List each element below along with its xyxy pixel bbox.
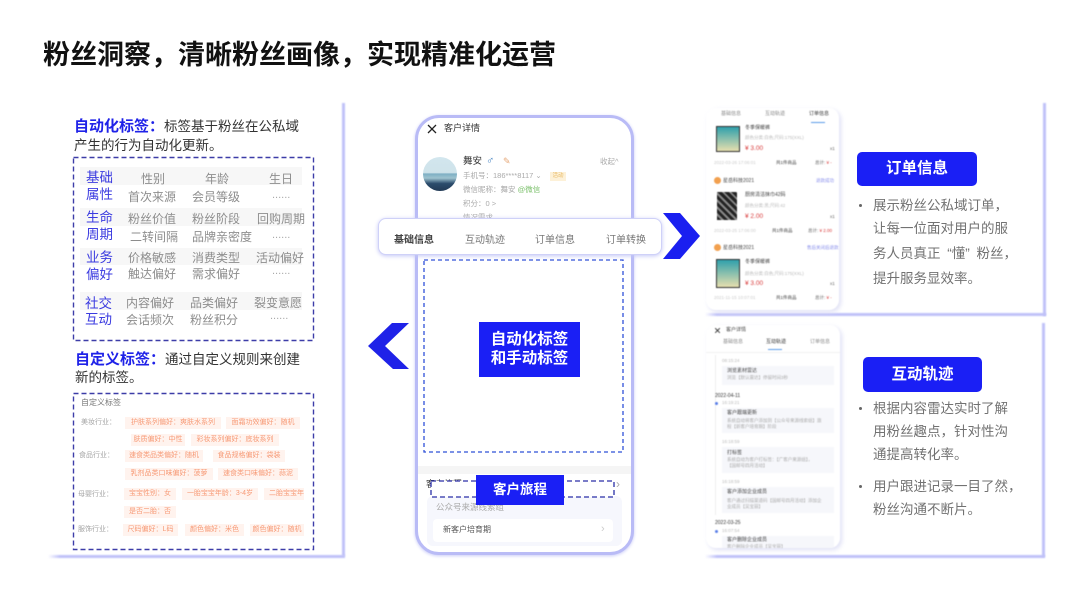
timeline header xyxy=(706,325,840,353)
tag table: 价格敏感 xyxy=(128,251,176,265)
custom tag list: 颜色偏好：随机 xyxy=(252,526,302,533)
tag table: 需求偏好 xyxy=(192,267,240,281)
bullet text: order info: 让每一位面对用户的服 xyxy=(873,221,1008,236)
tag table: 消费类型 xyxy=(192,251,240,265)
panel: order info xyxy=(706,102,1047,317)
tag table: 会员等级 xyxy=(192,190,240,204)
tag table: 会话频次 xyxy=(126,313,174,327)
custom tag list: 宝宝性别：女 xyxy=(129,490,171,497)
tag table: 偏好 xyxy=(86,267,113,282)
tab: order conversion: 订单转换 xyxy=(606,235,646,246)
tag table: 二转间隔 xyxy=(130,230,178,244)
order 1: 颜色分类:白色;尺码:175(XXL) xyxy=(745,135,804,140)
order 1 xyxy=(714,124,835,166)
tag table: ...... xyxy=(272,189,290,201)
dashed box: custom tags xyxy=(72,392,314,550)
order 2 xyxy=(713,176,835,234)
collapse link: 收起^ xyxy=(600,157,619,166)
timeline entries: 客户删除企业成员 xyxy=(727,537,767,543)
timeline entries: 客户添加企业成员 xyxy=(727,489,767,495)
order 2: 颜色分类:黑;尺码:42 xyxy=(745,203,785,208)
custom tag list: 护肤系列偏好：爽肤水系列 xyxy=(131,419,215,426)
order 3: 2021-11-15 10:07:01 xyxy=(714,295,755,300)
label: automatic and manual tags xyxy=(479,322,580,377)
custom tag list: 自定义标签 xyxy=(81,398,121,407)
order tabs: 基础信息 xyxy=(721,111,741,117)
tab: order info: 订单信息 xyxy=(535,235,575,246)
points: 积分：0 > xyxy=(463,199,496,208)
timeline entries: 客户跟端更新 xyxy=(727,410,757,416)
tag table: 裂变意愿 xyxy=(254,296,302,310)
phone: customer detail xyxy=(415,115,634,555)
custom tag list: 尺码偏好：L码 xyxy=(128,526,173,533)
dashed selection: journey xyxy=(430,480,615,498)
heading: automatic tags: 产生的行为自动化更新。 xyxy=(74,138,222,152)
label: customer journey: 客户旅程 xyxy=(493,482,547,497)
tag table: 粉丝价值 xyxy=(128,212,176,226)
tag table: 品牌亲密度 xyxy=(192,230,252,244)
timeline entries: 客户通过扫描渠道码【国邮号四月活动】添加企 xyxy=(727,498,822,503)
status badge xyxy=(550,172,566,181)
label: customer journey xyxy=(476,475,564,505)
order 1: 总计: ¥ - xyxy=(815,160,832,165)
heading: custom tags: 自定义标签：通过自定义规则来创建 xyxy=(75,351,300,368)
timeline header: 订单信息 xyxy=(810,339,830,345)
tag table: ...... xyxy=(272,229,290,241)
order 3: 共1件商品 xyxy=(776,295,797,300)
timeline entries: 【国邮号四月活动】 xyxy=(727,463,768,468)
tag table: 年龄 xyxy=(205,172,229,186)
bullet text: order info: 务人员真正 “懂” 粉丝， xyxy=(873,246,1017,261)
bullet text: order info: 提升服务显效率。 xyxy=(873,271,981,286)
tag table: 回购周期 xyxy=(257,212,305,226)
phone crop: timeline xyxy=(706,325,840,548)
tag table: 周期 xyxy=(86,227,113,242)
arrow: right chevron xyxy=(663,213,700,259)
order 3: 星岳科技2021 xyxy=(723,245,754,251)
tag table: 触达偏好 xyxy=(128,267,176,281)
custom tag list: 是否二胎：否 xyxy=(129,508,171,515)
dashed box: automatic tags xyxy=(72,156,314,342)
icon: close xyxy=(428,124,436,134)
custom tag list: 速食类口味偏好：蒜泥 xyxy=(223,470,293,477)
order 1: ¥ 3.00 xyxy=(745,145,763,152)
button: interaction track: 互动轨迹 xyxy=(891,366,954,383)
stage arrow: › xyxy=(601,523,605,535)
timeline entries: 浏览【默认雷达】停留时间3秒 xyxy=(727,375,788,380)
button: interaction track xyxy=(863,357,982,392)
tag table: 社交 xyxy=(85,296,112,311)
order 3 xyxy=(713,243,839,300)
timeline entries xyxy=(714,356,834,548)
tab: interaction: 互动轨迹 xyxy=(465,235,505,246)
tag table: 内容偏好 xyxy=(126,296,174,310)
order 3: x1 xyxy=(830,281,835,286)
order 2: x1 xyxy=(830,214,835,219)
tag table xyxy=(85,170,305,327)
label: automatic and manual tags: 和手动标签 xyxy=(491,350,568,366)
custom tag list: 彩妆系列偏好：底妆系列 xyxy=(196,436,274,443)
phone crop: orders xyxy=(706,108,839,310)
order tabs: 订单信息 xyxy=(809,111,829,117)
custom tag list: 美妆行业： xyxy=(81,419,116,426)
tab bar xyxy=(378,218,662,255)
button: order info: 订单信息 xyxy=(886,160,948,177)
heading: automatic tags: 自动化标签：标签基于粉丝在公私域 xyxy=(74,118,299,135)
custom tag list: 乳剂品类口味偏好：菠萝 xyxy=(130,470,208,477)
custom tag list: 服饰行业： xyxy=(78,526,113,533)
timeline entries: 2022-04-11 xyxy=(715,393,740,399)
tab: basic info: 基础信息 xyxy=(394,235,434,246)
timeline entries: 系统自动为客户打标签：【广客户来源组】， xyxy=(727,457,812,462)
icon: avatar xyxy=(423,157,457,191)
tag table: ...... xyxy=(270,310,288,322)
source label: 公众号来源线索组 xyxy=(436,502,504,512)
button: order info xyxy=(857,152,977,186)
bullet text: interaction track: 根据内容雷达实时了解 xyxy=(873,401,1008,416)
timeline entries: 2022-03-25 xyxy=(715,520,741,526)
tag table: 粉丝阶段 xyxy=(192,212,240,226)
timeline entries: 16:18:59 xyxy=(722,479,740,484)
custom tag list xyxy=(78,398,304,536)
heading: custom tags: 新的标签。 xyxy=(75,370,142,385)
custom tag list: 食品行业： xyxy=(79,452,114,459)
heading: custom tags xyxy=(75,351,300,385)
order 1: 共1件商品 xyxy=(776,160,797,165)
order 2: 共1件商品 xyxy=(772,228,793,233)
order 2: 退款成功 xyxy=(816,178,834,183)
timeline entries: 浏览素材雷达 xyxy=(727,368,757,374)
custom tag list: 母婴行业： xyxy=(78,491,113,498)
journey card xyxy=(427,496,622,546)
dashed selection: tags xyxy=(423,259,624,453)
status badge: 活动 xyxy=(552,173,564,179)
phone header title: 客户详情 xyxy=(444,123,480,133)
tag table: 粉丝积分 xyxy=(190,313,238,327)
order 2: 厨房清洁抹巾42码 xyxy=(745,192,786,198)
arrow: left chevron xyxy=(368,323,409,369)
order 3: 售后关闭后退款 xyxy=(807,245,838,250)
timeline entries: 业成员【吴宝丽】 xyxy=(727,504,763,509)
timeline entries: 16:18:59 xyxy=(722,439,740,444)
timeline header: 客户详情 xyxy=(726,327,746,333)
timeline header: 基础信息 xyxy=(723,339,743,345)
order tabs xyxy=(721,110,830,124)
phone number: 手机号：186****8117 ⌄ xyxy=(463,171,542,180)
tag table: 生命 xyxy=(86,210,113,225)
divider band xyxy=(418,466,631,474)
tag table: 互动 xyxy=(85,312,112,327)
bullet text: interaction track: 用粉丝趣点，针对性沟 xyxy=(873,424,1008,439)
order 2: ¥ 2.00 xyxy=(745,213,763,220)
custom tag list: 速食类品类偏好：随机 xyxy=(129,452,199,459)
custom tag list: 面霜功效偏好：随机 xyxy=(232,419,294,426)
stage name: 新客户培育期 xyxy=(443,525,491,534)
order 2: 星岳科技2021 xyxy=(723,178,754,184)
wechat nickname: 微信昵称：舞安 @微信 xyxy=(463,185,540,194)
custom tag list: 颜色偏好：米色 xyxy=(190,526,239,533)
tag table: 品类偏好 xyxy=(190,296,238,310)
heading: automatic tags xyxy=(74,118,299,152)
order tabs: 互动轨迹 xyxy=(765,111,785,117)
timeline entries: 系统自动将客户添加到【公众号来源线索组】旅 xyxy=(727,418,822,423)
clipped field: 情况需求 xyxy=(463,213,493,222)
journey row: 客户旅程 xyxy=(426,479,462,489)
timeline entries: 16:07:54 xyxy=(722,528,740,533)
custom tag list: 肤质偏好：中性 xyxy=(134,436,182,443)
label: automatic and manual tags: 自动化标签 xyxy=(491,331,568,348)
timeline header: 互动轨迹 xyxy=(766,339,786,345)
tag table: 属性 xyxy=(86,187,113,202)
tag table: 活动偏好 xyxy=(256,251,304,265)
bullet text: interaction track xyxy=(859,401,1022,517)
panel: left tags xyxy=(50,102,346,559)
panel: interaction track xyxy=(706,322,1046,559)
tag table: 基础 xyxy=(86,170,113,185)
order 3: 总计: ¥ - xyxy=(815,295,832,300)
tag table: 性别 xyxy=(141,172,165,186)
tag table: 首次来源 xyxy=(128,190,176,204)
order 2: 2022-03-25 17:06:00 xyxy=(714,228,756,233)
custom tag list: 一胎宝宝年龄：3-4岁 xyxy=(187,490,253,497)
bullet text: order info xyxy=(859,198,1017,286)
bullet text: order info: 展示粉丝公私域订单， xyxy=(873,198,1008,213)
customer name: 舞安 xyxy=(463,156,482,167)
icon: edit: ✎ xyxy=(503,156,511,166)
custom tag list: 二胎宝宝年 xyxy=(269,490,304,497)
bullet text: interaction track: 用户跟进记录一目了然， xyxy=(873,479,1022,494)
journey arrow: › xyxy=(616,477,620,491)
tag table: ...... xyxy=(272,265,290,277)
tag table: 业务 xyxy=(86,250,113,265)
timeline entries: 程【新客户培育期】阶段 xyxy=(727,424,776,429)
order 3: 冬季保暖裤 xyxy=(745,259,770,265)
timeline entries: 08:15:24 xyxy=(722,358,740,363)
timeline entries: 打标签 xyxy=(727,450,742,456)
order 1: x1 xyxy=(830,146,835,151)
order 1: 2022-03-26 17:06:01 xyxy=(714,160,756,165)
title: 粉丝洞察，清晰粉丝画像，实现精准化运营 xyxy=(43,40,556,70)
order 3: 颜色分类:白色;尺码:175(XXL) xyxy=(745,271,804,276)
order 1: 冬季保暖裤 xyxy=(745,125,770,131)
timeline entries: 16:19:21 xyxy=(722,400,740,405)
tag table: 生日 xyxy=(269,172,293,186)
order 2: 总计: ¥ 2.00 xyxy=(808,228,832,233)
bullet text: interaction track: 粉丝沟通不断片。 xyxy=(873,502,981,517)
icon: male: ♂ xyxy=(486,155,494,167)
custom tag list: 食品规格偏好：袋装 xyxy=(218,452,280,459)
bullet text: interaction track: 通提高转化率。 xyxy=(873,447,968,462)
stage row xyxy=(433,519,613,542)
order 3: ¥ 3.00 xyxy=(745,280,763,287)
